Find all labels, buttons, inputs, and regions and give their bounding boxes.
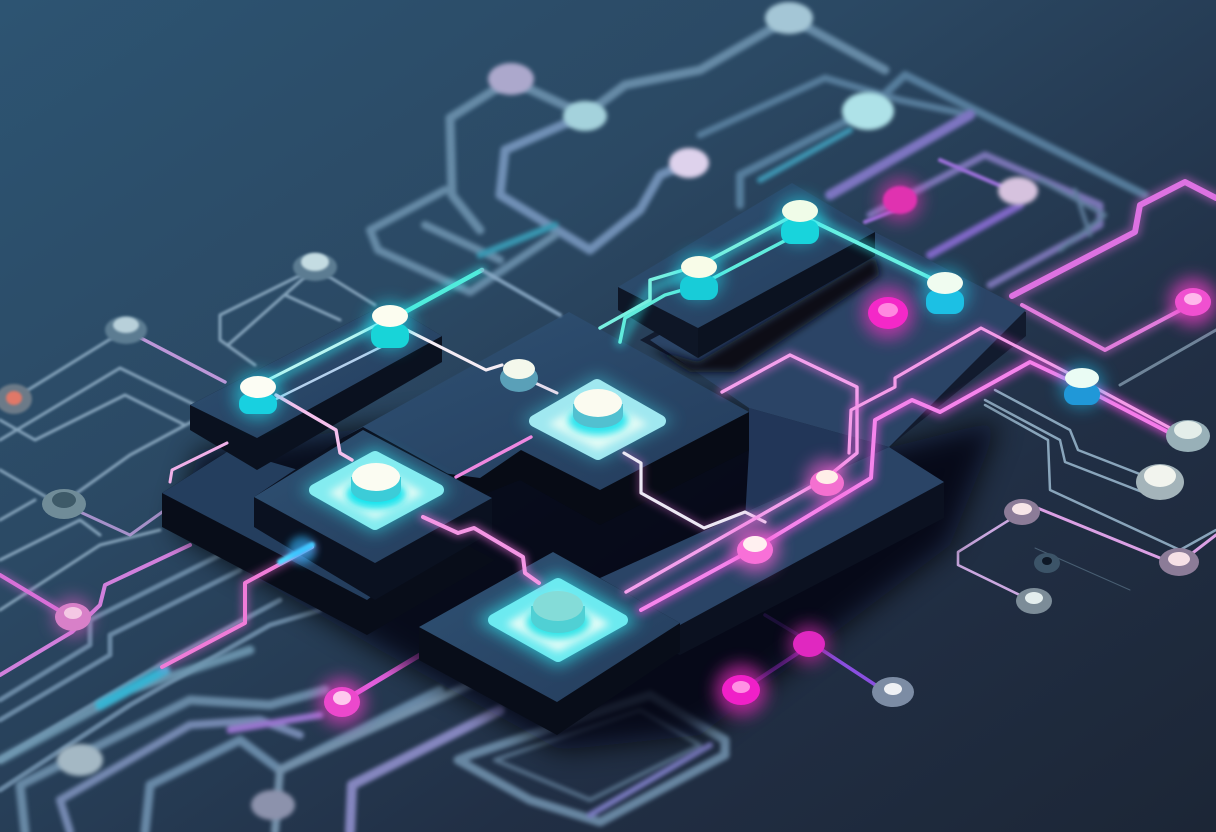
node: blurred background terminals	[57, 2, 1038, 820]
glowing traces: white and pink	[162, 328, 1170, 667]
node: magenta dots	[53, 178, 1216, 726]
traces: right side	[340, 160, 1216, 703]
traces: bottom left	[0, 650, 725, 832]
platform: lower left deck	[162, 450, 495, 635]
platform: right lower deck	[600, 447, 944, 655]
cast shadows under blocks	[175, 400, 1000, 750]
platform: left bar	[190, 303, 442, 470]
chip: center right	[530, 380, 665, 456]
glowing traces: cyan	[258, 212, 945, 402]
blurred background traces: top	[370, 18, 1145, 292]
chip: bottom	[419, 552, 680, 735]
platform: center deck	[344, 312, 749, 525]
node: pale round terminals	[0, 253, 1210, 707]
node: cyan studs on bars	[234, 196, 1104, 420]
platform: right deck and top bar	[618, 183, 1026, 520]
traces: left side	[0, 268, 375, 790]
chip: center left	[254, 427, 492, 600]
